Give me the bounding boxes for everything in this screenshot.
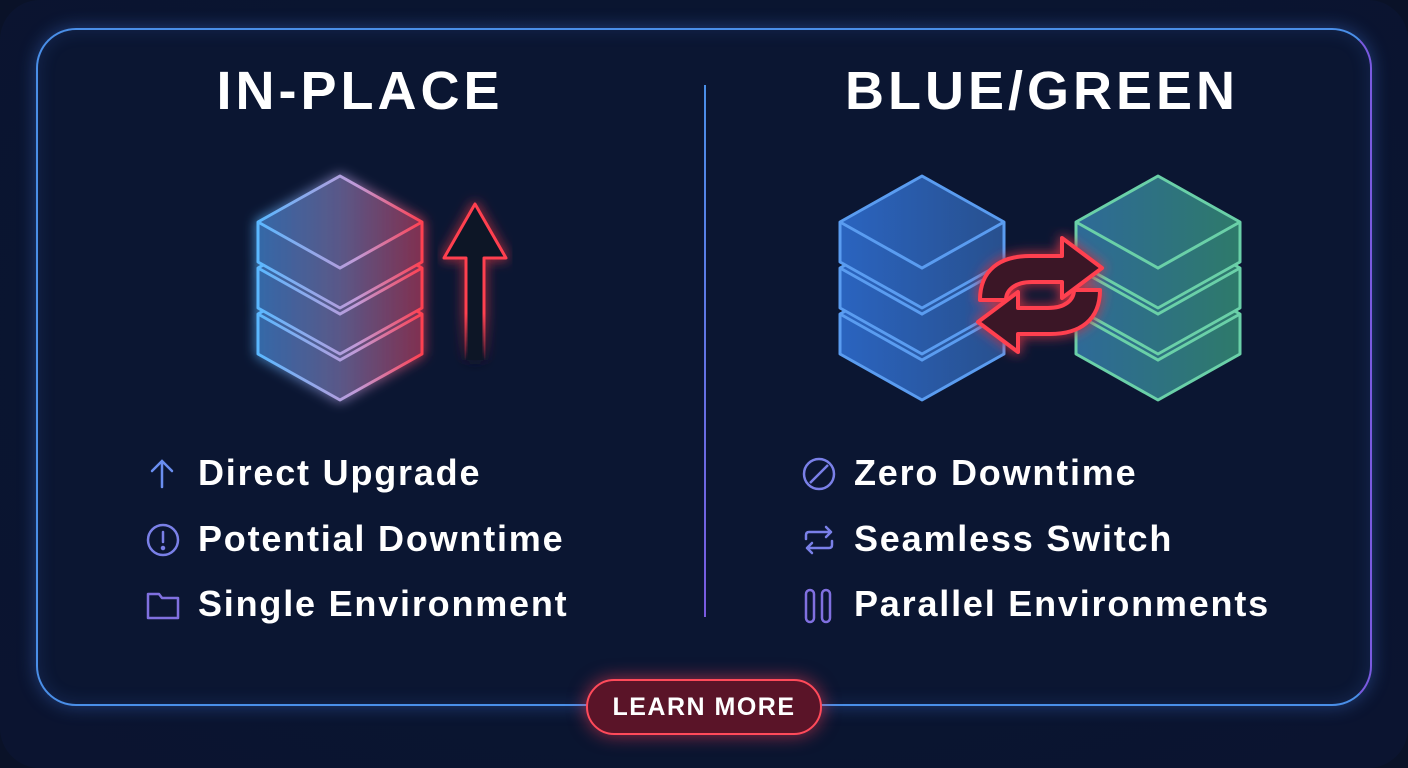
icon: green database stack	[1076, 176, 1240, 400]
item: potential downtime	[146, 518, 564, 559]
button: learn more	[586, 679, 822, 735]
button: learn more: LEARN MORE	[612, 693, 796, 721]
list: blue/green features: Zero Downtime	[854, 452, 1137, 493]
list: blue/green features	[802, 452, 1270, 624]
list: in-place features: Single Environment	[198, 583, 568, 624]
list: blue/green features: Parallel Environments	[854, 583, 1270, 624]
list: in-place features: Potential Downtime	[198, 518, 564, 559]
item: parallel environments	[804, 583, 1270, 624]
item: seamless switch	[804, 518, 1173, 559]
list: in-place features	[146, 452, 568, 624]
title: blue/green: BLUE/GREEN	[845, 61, 1239, 121]
icon: left database stack	[258, 176, 422, 400]
icon: swap arrows	[978, 238, 1102, 352]
icon: upgrade arrow	[444, 204, 506, 360]
item: direct upgrade	[150, 452, 481, 493]
list: in-place features: Direct Upgrade	[198, 452, 481, 493]
list: blue/green features: Seamless Switch	[854, 518, 1173, 559]
item: zero downtime	[802, 452, 1137, 493]
item: single environment	[146, 583, 568, 624]
title: in-place: IN-PLACE	[216, 61, 504, 121]
icon: blue database stack	[840, 176, 1004, 400]
